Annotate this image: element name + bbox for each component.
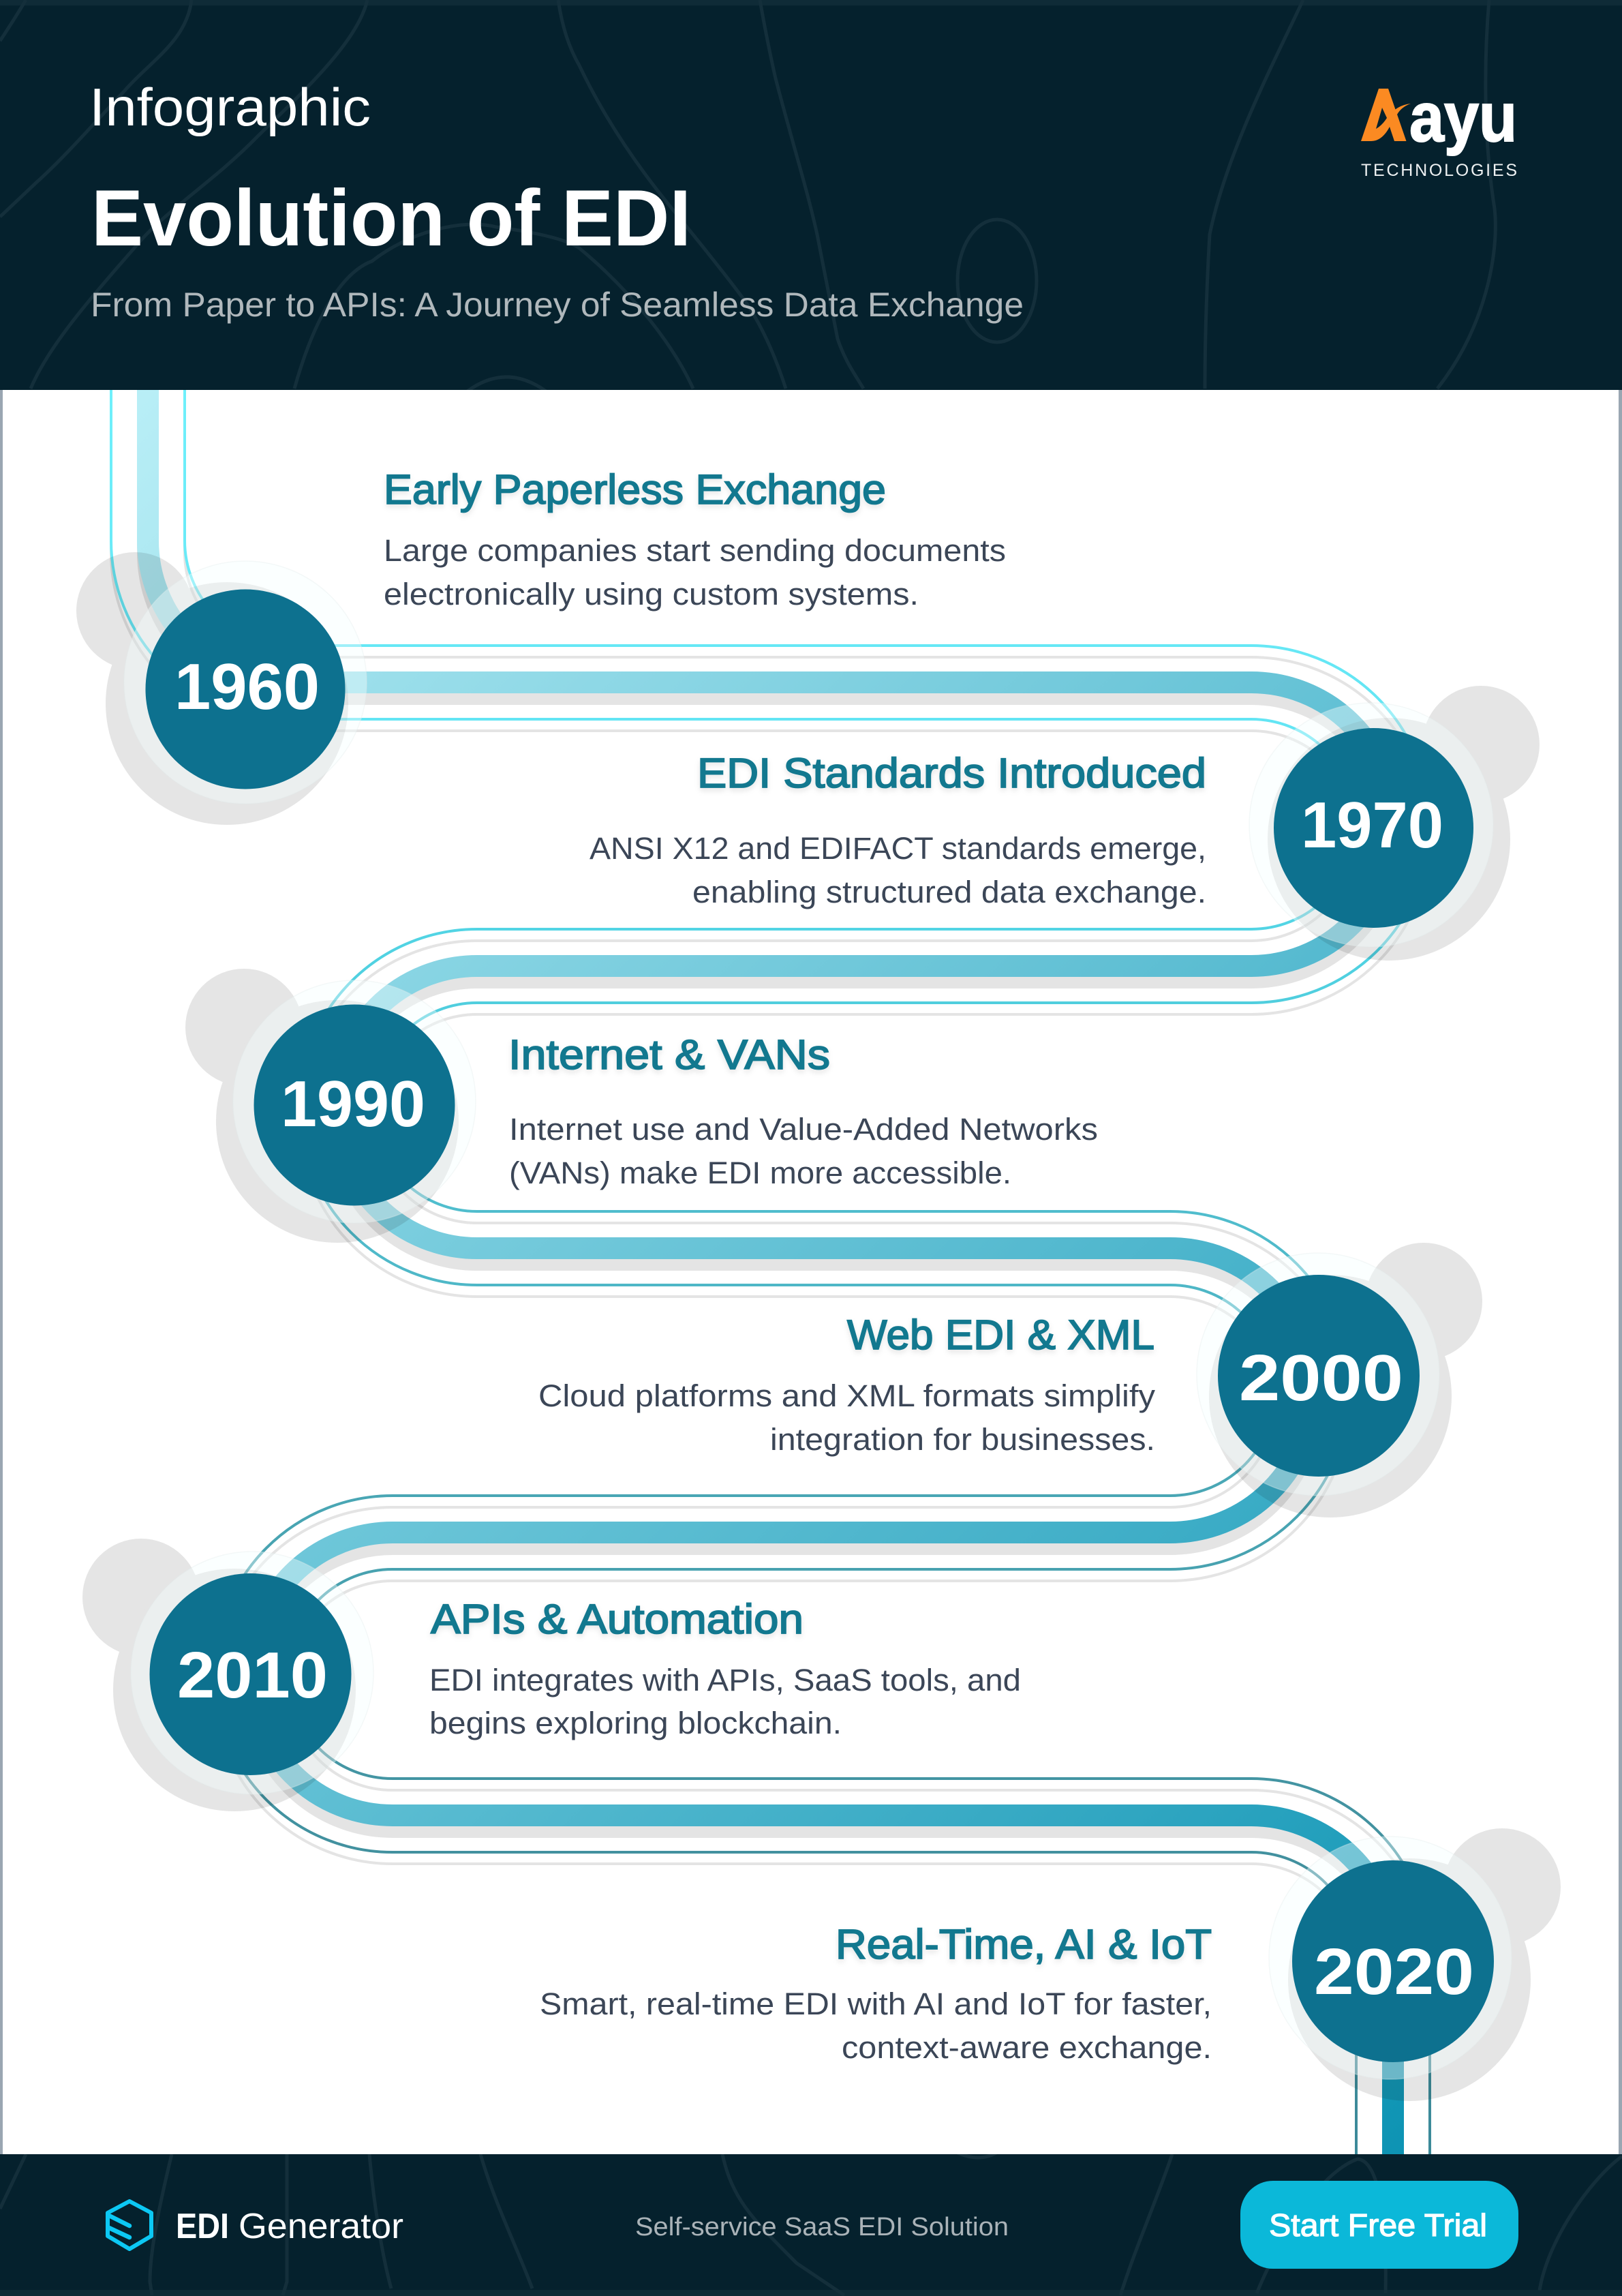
milestone: 1970 [1249, 703, 1493, 947]
text block: EDI Standards Introduced: EDI Standards Introduced [697, 750, 1206, 796]
milestone: 2010 [131, 1552, 373, 1794]
text block: Internet & VANs: (VANs) make EDI more accessible. [509, 1155, 1011, 1190]
text block: Real-Time, AI & IoT: Smart, real-time EDI with AI and IoT for faster, [540, 1987, 1212, 2021]
milestone: 2020: 2020 [1314, 1935, 1474, 2008]
milestone: 1960: 1960 [174, 650, 320, 723]
milestone: 2010: 2010 [177, 1639, 328, 1712]
text block: EDI Standards Introduced: ANSI X12 and EDIFACT standards emerge, [590, 831, 1206, 866]
icon: EDI Generator hexagon [108, 2201, 151, 2249]
text block: APIs & Automation: EDI integrates with APIs, SaaS tools, and [429, 1663, 1021, 1697]
text block: Early Paperless Exchange: Large companies start sending documents [384, 533, 1006, 568]
milestone: 1970: 1970 [1301, 789, 1443, 862]
text block: APIs & Automation [429, 1596, 1021, 1740]
text block: Web EDI & XML: integration for businesses. [770, 1422, 1155, 1457]
text block: Web EDI & XML [538, 1312, 1156, 1457]
text block: Real-Time, AI & IoT [540, 1921, 1212, 2065]
brand: EDI Generator: Generator [239, 2207, 403, 2246]
text block: Real-Time, AI & IoT: context-aware exchange. [842, 2030, 1212, 2065]
milestone: 1960 [124, 561, 367, 804]
panel: header [0, 0, 1622, 393]
milestone: 1990: 1990 [281, 1068, 425, 1141]
milestone: 2020 [1269, 1837, 1512, 2079]
text block: Web EDI & XML: Cloud platforms and XML formats simplify [538, 1378, 1156, 1413]
grey shadow circles behind the milestones [76, 552, 1561, 2101]
logo: Aayu Technologies [1361, 78, 1517, 180]
text block: Early Paperless Exchange: Early Paperless Exchange [384, 466, 886, 513]
logo: Aayu Technologies: ayu [1409, 78, 1517, 156]
label: Infographic: Infographic [89, 77, 371, 137]
text block: Internet & VANs [508, 1031, 1098, 1190]
brand: EDI Generator: EDI [176, 2207, 229, 2246]
text block: Real-Time, AI & IoT: Real-Time, AI & IoT [836, 1921, 1212, 1967]
text block: Early Paperless Exchange [384, 466, 1006, 611]
title: Evolution of EDI [91, 173, 691, 262]
tagline: Self-service SaaS EDI Solution [635, 2213, 1009, 2241]
milestone: 2000: 2000 [1239, 1342, 1403, 1415]
milestone: 2000 [1197, 1253, 1439, 1496]
text block: Web EDI & XML: Web EDI & XML [847, 1312, 1154, 1358]
logo: Aayu Technologies: TECHNOLOGIES [1361, 161, 1517, 180]
text block: EDI Standards Introduced [590, 750, 1206, 909]
milestone: 1990 [233, 980, 476, 1223]
text block: APIs & Automation: APIs & Automation [431, 1596, 804, 1642]
panel: footer [0, 2153, 1622, 2296]
text block: Early Paperless Exchange: electronically using custom systems. [384, 577, 919, 611]
subtitle: From Paper to APIs: A Journey of Seamless Data Exchange [91, 286, 1024, 324]
timeline winding path [111, 390, 1430, 2166]
text block: APIs & Automation: begins exploring blockchain. [429, 1706, 842, 1740]
text block: Internet & VANs: Internet & VANs [508, 1031, 830, 1078]
button: Start Free Trial: Start Free Trial [1269, 2207, 1487, 2243]
text block: Internet & VANs: Internet use and Value-Added Networks [509, 1112, 1098, 1147]
text block: EDI Standards Introduced: enabling structured data exchange. [692, 875, 1206, 909]
button: Start Free Trial [1240, 2181, 1518, 2269]
